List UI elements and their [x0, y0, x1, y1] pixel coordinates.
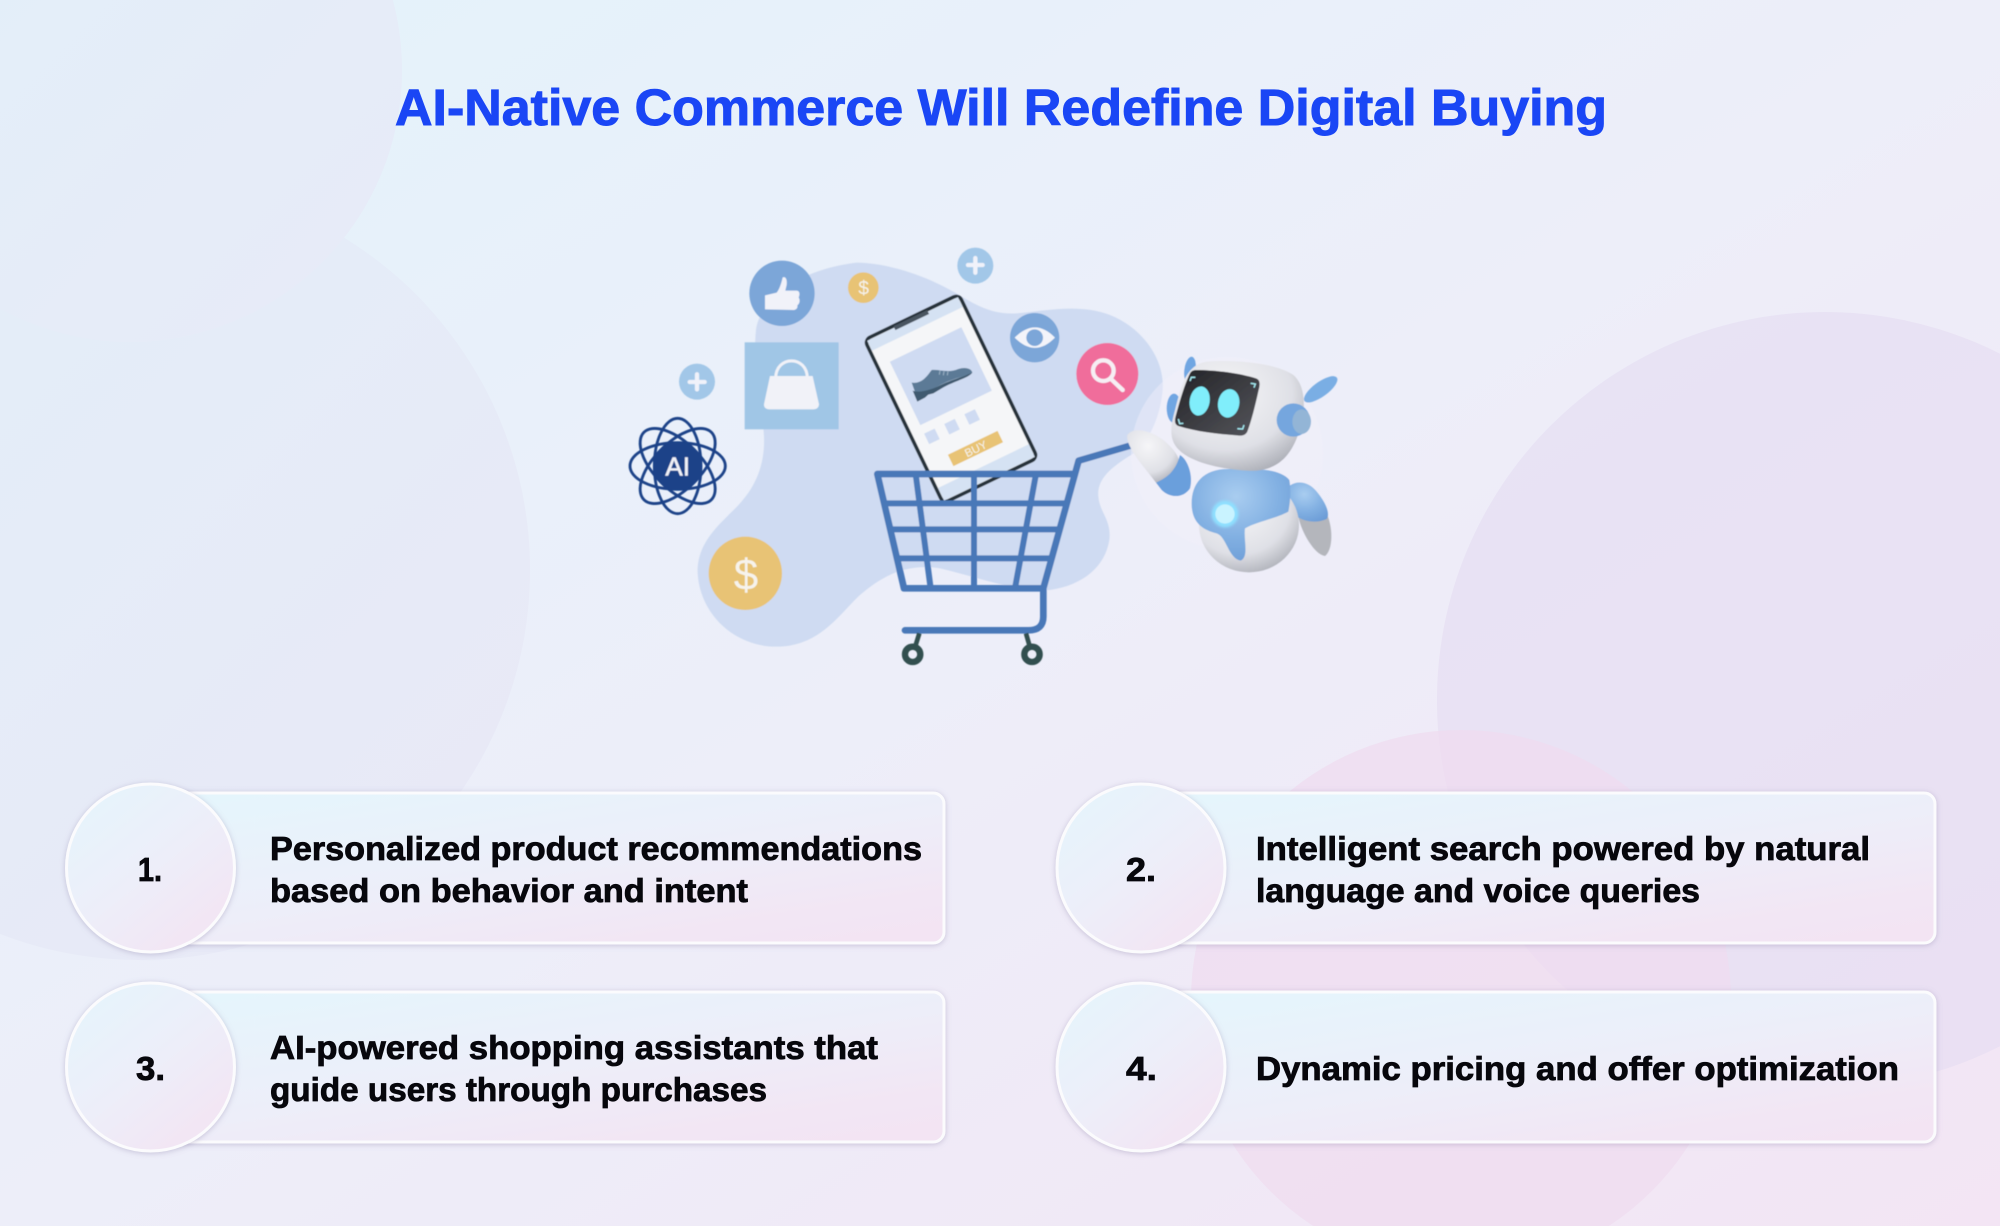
head	[1171, 361, 1304, 471]
number badge 1	[66, 784, 234, 952]
illustration: AI shopping cart and robot	[627, 248, 1341, 662]
card 1 text	[270, 830, 922, 909]
icon: shopping bag	[745, 342, 839, 429]
icon: AI atom: AI	[665, 451, 690, 481]
blob backdrop	[698, 263, 1163, 647]
robot	[1127, 356, 1341, 572]
card 3 text	[270, 1029, 878, 1108]
title: AI-Native Commerce Will Redefine Digital Buying	[395, 79, 1607, 136]
card 4	[1057, 983, 1935, 1151]
icon: magnifier	[1076, 343, 1138, 405]
card 1 text: based on behavior and intent	[270, 872, 748, 909]
number badge 3	[66, 983, 234, 1151]
number badge 2	[1057, 784, 1225, 952]
icon: thumbs up	[749, 261, 815, 326]
card 2	[1057, 784, 1935, 952]
chest light	[1212, 501, 1238, 527]
faint circle behind robot	[1131, 357, 1323, 549]
icon: plus top	[957, 248, 993, 284]
icon: eye	[1010, 313, 1059, 362]
card 3	[66, 983, 944, 1151]
phone: BUY	[963, 439, 990, 460]
number badge 4: 4.	[1126, 1050, 1157, 1087]
number badge 3: 3.	[136, 1050, 165, 1087]
card 1 text: Personalized product recommendations	[270, 830, 922, 867]
ear	[1277, 403, 1310, 437]
screen	[1175, 370, 1260, 436]
wheels	[905, 633, 1040, 662]
waving arm	[1127, 430, 1179, 483]
antennae	[1183, 356, 1197, 384]
body	[1199, 478, 1299, 572]
icon: AI atom	[627, 416, 728, 516]
card 4 text: Dynamic pricing and offer optimization	[1256, 1050, 1899, 1087]
icon: small dollar coin	[848, 272, 879, 303]
card 2 text: language and voice queries	[1256, 872, 1700, 909]
card 3 text: AI-powered shopping assistants that	[270, 1029, 878, 1066]
card 2 text	[1256, 830, 1870, 909]
shoe	[912, 368, 972, 402]
number badge 4	[1057, 983, 1225, 1151]
icon: large dollar coin: $	[734, 550, 758, 599]
number badge 1: 1.	[138, 851, 162, 888]
phone	[865, 294, 1038, 503]
icon: small dollar coin: $	[858, 279, 869, 300]
shopping cart	[877, 446, 1130, 662]
right arm	[1298, 515, 1331, 556]
card 3 text: guide users through purchases	[270, 1071, 767, 1108]
icon: large dollar coin	[709, 537, 782, 610]
eyes	[1187, 385, 1212, 417]
icon: plus left	[679, 364, 715, 400]
card 2 text: Intelligent search powered by natural	[1256, 830, 1870, 867]
card 1	[66, 784, 944, 952]
number badge 2: 2.	[1126, 851, 1156, 888]
